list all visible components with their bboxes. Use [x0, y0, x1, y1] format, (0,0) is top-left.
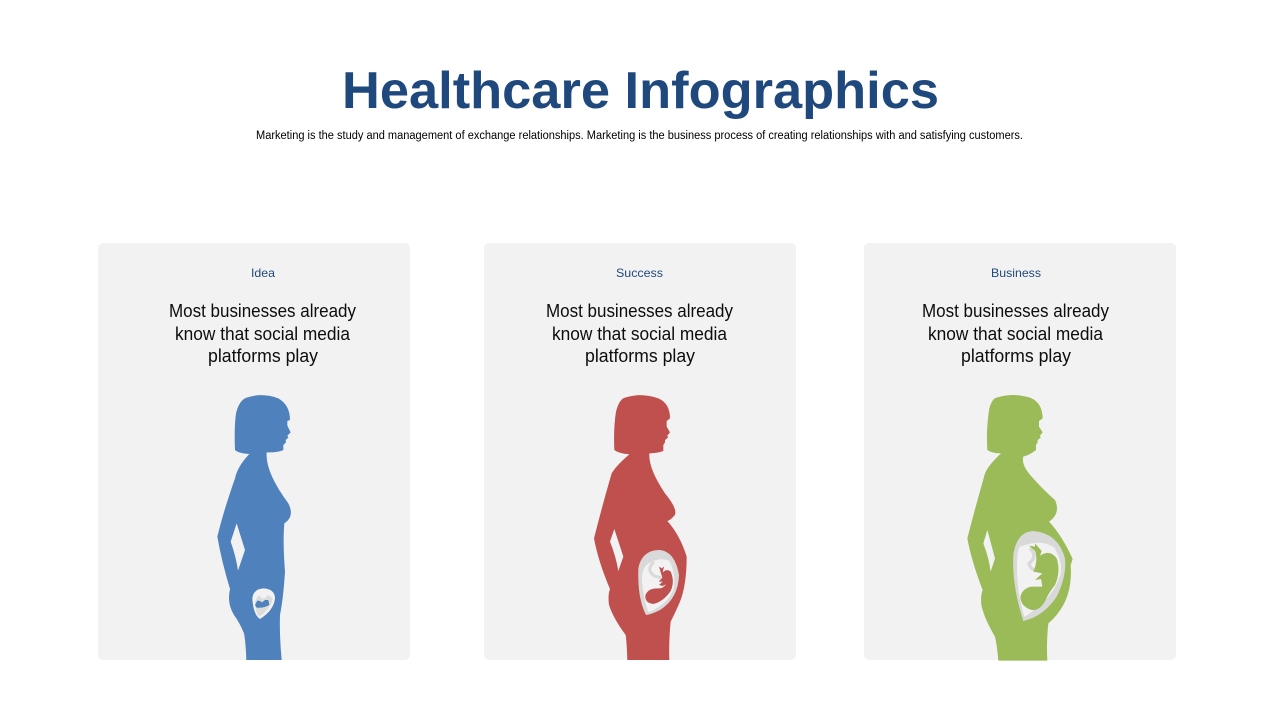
- label: success: Success: [616, 266, 663, 280]
- panel: business: [864, 243, 1176, 661]
- text block: idea: know that social media: [175, 324, 351, 344]
- panel: success: [484, 243, 796, 660]
- label: business: Business: [991, 266, 1041, 280]
- text block: business: Most businesses already: [922, 301, 1109, 321]
- title: Healthcare Infographics: [342, 62, 939, 120]
- text block: success: know that social media: [552, 324, 728, 344]
- icon: early pregnancy silhouette, blue: [217, 395, 291, 660]
- text block: idea: [169, 301, 356, 366]
- text block: idea: Most businesses already: [169, 301, 356, 321]
- text block: business: platforms play: [961, 346, 1071, 366]
- text block: business: know that social media: [928, 324, 1104, 344]
- text block: business: [922, 301, 1109, 366]
- text block: success: platforms play: [585, 346, 695, 366]
- subtitle: Marketing is the study and management of exchange relationships. Marketing is the business process of creating relationships with and satisfying customers.: [256, 130, 1023, 142]
- text block: success: Most businesses already: [546, 301, 733, 321]
- icon: late pregnancy silhouette, green: [967, 395, 1073, 661]
- panel: idea: [98, 243, 410, 660]
- icon: mid pregnancy silhouette, red: [594, 395, 687, 660]
- text block: success: [546, 301, 733, 366]
- text block: idea: platforms play: [208, 346, 318, 366]
- label: idea: Idea: [251, 266, 275, 280]
